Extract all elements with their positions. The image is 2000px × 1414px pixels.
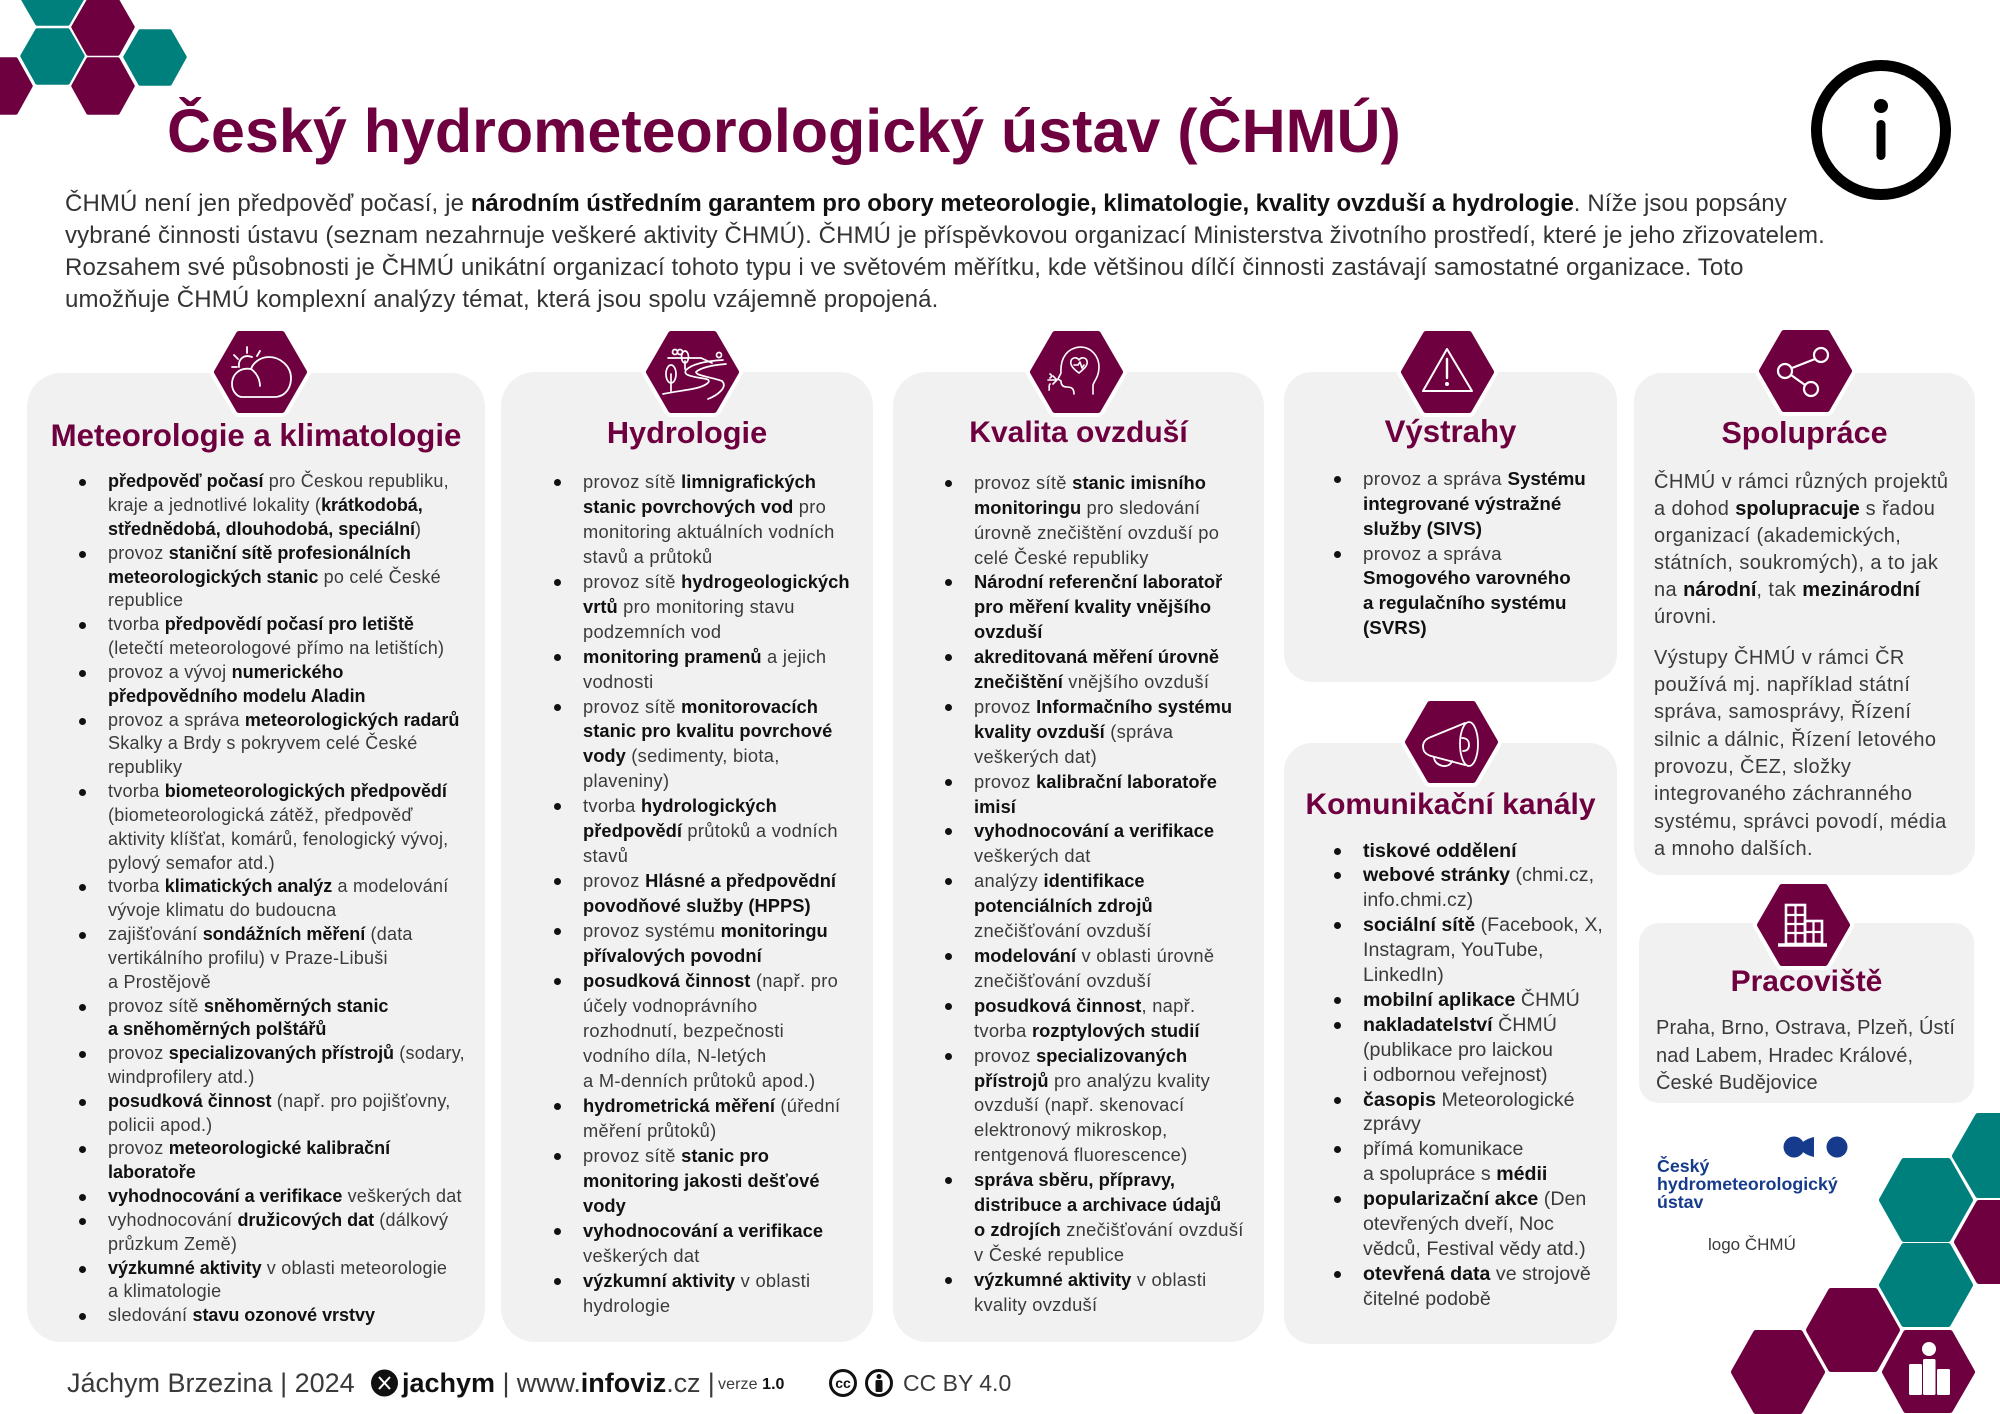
icon: head with heart [1026, 331, 1127, 417]
heading: Meteorologie a klimatologie [51, 418, 461, 453]
list: předpověď počasí pro Českou republiku, [108, 471, 449, 491]
paragraph 1 [1654, 470, 1948, 628]
list: provoz specializovaných [974, 1045, 1187, 1066]
list: policii apod.) [108, 1115, 212, 1135]
locations text [1656, 1016, 1955, 1094]
paragraph 1: na národní, tak mezinárodní [1654, 578, 1920, 600]
list: vývoje klimatu do budoucna [108, 900, 336, 920]
list: sledování stavu ozonové vrstvy [108, 1305, 375, 1325]
list: otevřených dveří, Noc [1363, 1213, 1554, 1235]
list: republice [108, 590, 183, 610]
list: provoz a správa [1363, 543, 1502, 564]
list: časopis Meteorologické [1363, 1089, 1575, 1111]
paragraph 2: integrovaného záchranného [1654, 783, 1912, 805]
list: provoz meteorologické kalibrační [108, 1138, 390, 1158]
list: vrtů pro monitoring stavu [583, 596, 795, 617]
intro text: umožňuje ČHMÚ komplexní analýzy témat, která jsou spolu vzájemně propojená. [65, 286, 938, 313]
list: webové stránky (chmi.cz, [1363, 864, 1594, 886]
list: kvality ovzduší (správa [974, 721, 1173, 742]
list: stavů [583, 845, 628, 866]
license: CC BY 4.0 [903, 1370, 1011, 1396]
list: analýzy identifikace [974, 870, 1145, 891]
list: monitoring pramenů a jejich [583, 646, 826, 667]
list: přímá komunikace [1363, 1138, 1523, 1160]
list: a sněhoměrných polštářů [108, 1019, 326, 1039]
list: v České republice [974, 1244, 1124, 1265]
list: imisí [974, 796, 1016, 817]
list: a klimatologie [108, 1281, 221, 1301]
panel: výstrahy [1284, 372, 1617, 682]
icon: info [1811, 60, 1951, 200]
list: Národní referenční laboratoř [974, 571, 1222, 592]
icon: cc: cc [835, 1375, 851, 1391]
list [945, 472, 1244, 1315]
list: vyhodnocování a verifikace [583, 1220, 823, 1241]
panel: spolupráce [1634, 373, 1975, 875]
list: vyhodnocování a verifikace [974, 820, 1214, 841]
list: vody [583, 1195, 626, 1216]
icon: megaphone [1401, 701, 1502, 787]
icon: infographic logo hexagon with podium [1882, 1330, 1975, 1413]
list: Skalky a Brdy s pokryvem celé České [108, 733, 418, 753]
list: hydrologie [583, 1295, 670, 1316]
icon: river landscape [642, 331, 743, 417]
list: stanic pro kvalitu povrchové [583, 720, 832, 741]
list: posudková činnost (např. pro pojišťovny, [108, 1091, 451, 1111]
footer [67, 1368, 1011, 1398]
locations text: Praha, Brno, Ostrava, Plzeň, Ústí [1656, 1017, 1955, 1039]
panel: pracoviště [1639, 923, 1974, 1103]
panel: meteorologie a klimatologie [27, 373, 485, 1342]
list [1334, 468, 1586, 638]
icon: X [371, 1370, 398, 1396]
list: úrovně znečištění ovzduší po [974, 522, 1219, 543]
list: monitoring aktuálních vodních [583, 521, 835, 542]
list: elektronový mikroskop, [974, 1119, 1168, 1140]
list: vodního díla, N-letých [583, 1045, 766, 1066]
locations text: České Budějovice [1656, 1072, 1818, 1094]
list: aktivity klíšťat, komárů, fenologický vývoj, [108, 829, 448, 849]
paragraph 2: Výstupy ČHMÚ v rámci ČR [1654, 647, 1905, 669]
paragraph 2: používá mj. například státní [1654, 674, 1910, 696]
list: (publikace pro laickou [1363, 1039, 1553, 1061]
paragraph 1: státních, soukromých), a to jak [1654, 552, 1938, 574]
list: modelování v oblasti úrovně [974, 945, 1214, 966]
list: republiky [108, 757, 182, 777]
logo mark [1784, 1136, 1848, 1158]
list: plaveniny) [583, 770, 669, 791]
title: Český hydrometeorologický ústav (ČHMÚ) [167, 97, 1401, 165]
list: provoz specializovaných přístrojů (sodary, [108, 1043, 465, 1063]
list: veškerých dat) [974, 746, 1097, 767]
list: zajišťování sondážních měření (data [108, 924, 413, 944]
icon: share nodes [1756, 330, 1856, 416]
list: znečišťování ovzduší [974, 970, 1151, 991]
list: vyhodnocování družicových dat (dálkový [108, 1210, 448, 1230]
logo caption: logo ČHMÚ [1708, 1235, 1796, 1254]
heading: Komunikační kanály [1305, 788, 1596, 821]
list: vyhodnocování a verifikace veškerých dat [108, 1186, 462, 1206]
heading: Spolupráce [1721, 416, 1888, 450]
list: (SVRS) [1363, 617, 1427, 638]
paragraph 2 [1654, 646, 1947, 860]
list: vody (sedimenty, biota, [583, 745, 780, 766]
handle and website: jachym | www.infoviz.cz | [402, 1368, 715, 1398]
list: vodnosti [583, 671, 654, 692]
logo wordmark [1657, 1156, 1838, 1212]
intro text [65, 190, 1825, 313]
author and year: Jáchym Brzezina | 2024 [67, 1368, 355, 1398]
list: tvorba hydrologických [583, 795, 777, 816]
list: laboratoře [108, 1162, 196, 1182]
list: hydrometrická měření (úřední [583, 1095, 840, 1116]
paragraph 1: úrovni. [1654, 606, 1717, 628]
list: měření průtoků) [583, 1120, 717, 1141]
list: služby (SIVS) [1363, 518, 1482, 539]
list: provoz a vývoj numerického [108, 662, 343, 682]
list: nakladatelství ČHMÚ [1363, 1014, 1557, 1036]
list: průzkum Země) [108, 1234, 237, 1254]
decoration: hexagons top left [0, 0, 187, 115]
list: Instagram, YouTube, [1363, 939, 1543, 961]
list: rozhodnutí, bezpečnosti [583, 1020, 784, 1041]
list: přívalových povodní [583, 945, 762, 966]
list: rentgenová fluorescence) [974, 1144, 1188, 1165]
icon: sun and cloud [210, 331, 311, 417]
list: provoz kalibrační laboratoře [974, 771, 1217, 792]
list: otevřená data ve strojově [1363, 1263, 1591, 1285]
icon: cc [829, 1369, 893, 1397]
list: ovzduší (např. skenovací [974, 1094, 1184, 1115]
intro text: Rozsahem své působnosti je ČHMÚ unikátní organizací tohoto typu i ve světovém měřítku, kde většinou dílčí činnosti zastávají samostatné organizace. Toto [65, 254, 1744, 281]
list: tiskové oddělení [1363, 840, 1517, 862]
list: znečišťování ovzduší [974, 920, 1151, 941]
list: tvorba biometeorologických předpovědí [108, 781, 447, 801]
heading: Výstrahy [1385, 414, 1516, 449]
list: LinkedIn) [1363, 964, 1444, 986]
list: provoz systému monitoringu [583, 920, 828, 941]
logo wordmark: Český [1657, 1156, 1709, 1176]
list: provoz a správa meteorologických radarů [108, 710, 459, 730]
list: ovzduší [974, 621, 1042, 642]
list: vědců, Festival vědy atd.) [1363, 1238, 1586, 1260]
paragraph 1: organizací (akademických, [1654, 524, 1901, 546]
list: mobilní aplikace ČHMÚ [1363, 989, 1580, 1011]
list: i odbornou veřejnost) [1363, 1064, 1548, 1086]
version: verze 1.0 [718, 1376, 784, 1393]
icon: buildings [1753, 884, 1854, 970]
list: celé České republiky [974, 547, 1149, 568]
paragraph 1: ČHMÚ v rámci různých projektů [1654, 470, 1948, 492]
list: o zdrojích znečišťování ovzduší [974, 1219, 1244, 1240]
list: kraje a jednotlivé lokality (krátkodobá, [108, 495, 423, 515]
heading: Hydrologie [607, 415, 767, 450]
intro text: vybrané činnosti ústavu (seznam nezahrnuje veškeré aktivity ČHMÚ). ČHMÚ je příspěvkovou organizací Ministerstva životního prostředí, které je jeho zřizovatelem. [65, 222, 1825, 249]
list: výzkumné aktivity v oblasti meteorologie [108, 1258, 447, 1278]
list: posudková činnost (např. pro [583, 970, 838, 991]
logo ČHMÚ [1657, 1136, 1848, 1254]
list: provoz sítě stanic imisního [974, 472, 1206, 493]
list: provoz sítě sněhoměrných stanic [108, 996, 388, 1016]
decoration: hexagons bottom right [1731, 1113, 2000, 1414]
list: provoz a správa Systému [1363, 468, 1586, 489]
panel: kvalita ovzduší [893, 372, 1264, 1342]
panel: hydrologie [501, 372, 873, 1342]
list: akreditovaná měření úrovně [974, 646, 1219, 667]
list: zprávy [1363, 1113, 1421, 1135]
list: veškerých dat [974, 845, 1091, 866]
logo wordmark: ústav [1657, 1192, 1703, 1212]
list: tvorba předpovědí počasí pro letiště [108, 614, 414, 634]
list: provoz Hlásné a předpovědní [583, 870, 836, 891]
list: správa sběru, přípravy, [974, 1169, 1175, 1190]
list: a spolupráce s médii [1363, 1163, 1547, 1185]
list: provoz Informačního systému [974, 696, 1232, 717]
list: meteorologických stanic po celé České [108, 567, 441, 587]
list: a regulačního systému [1363, 592, 1567, 613]
list: a Prostějově [108, 972, 211, 992]
heading: Kvalita ovzduší [969, 416, 1188, 449]
paragraph 2: správa, samosprávy, Řízení [1654, 701, 1911, 723]
list: provoz staniční sítě profesionálních [108, 543, 411, 563]
list: veškerých dat [583, 1245, 700, 1266]
list: a M-denních průtoků apod.) [583, 1070, 815, 1091]
list: přístrojů pro analýzu kvality [974, 1070, 1210, 1091]
list: předpovědního modelu Aladin [108, 686, 366, 706]
list: stavů a průtoků [583, 546, 712, 567]
list: distribuce a archivace údajů [974, 1194, 1221, 1215]
list: znečištění vnějšího ovzduší [974, 671, 1209, 692]
list: monitoring jakosti dešťové [583, 1170, 820, 1191]
paragraph 2: systému, správci povodí, média [1654, 811, 1947, 833]
list [79, 470, 465, 1325]
list: provoz sítě monitorovacích [583, 696, 818, 717]
list: předpovědí průtoků a vodních [583, 820, 838, 841]
list: (biometeorologická zátěž, předpověď [108, 805, 413, 825]
list: (letečtí meteorologové přímo na letištích) [108, 638, 444, 658]
list: posudková činnost, např. [974, 995, 1195, 1016]
list: popularizační akce (Den [1363, 1188, 1586, 1210]
list: střednědobá, dlouhodobá, speciální) [108, 519, 421, 539]
list: Smogového varovného [1363, 567, 1571, 588]
list: pro měření kvality vnějšího [974, 596, 1211, 617]
paragraph 1: a dohod spolupracuje s řadou [1654, 498, 1935, 520]
paragraph 2: a mnoho dalších. [1654, 838, 1813, 860]
list: čitelné podobě [1363, 1288, 1491, 1310]
heading: Pracoviště [1731, 965, 1882, 998]
list: kvality ovzduší [974, 1294, 1097, 1315]
paragraph 2: provozu, ČEZ, složky [1654, 756, 1851, 778]
list: vertikálního profilu) v Praze-Libuši [108, 948, 388, 968]
paragraph 2: silnic a dálnic, Řízení letového [1654, 729, 1936, 751]
list: integrované výstražné [1363, 493, 1561, 514]
list [1334, 840, 1603, 1310]
panel: komunikační kanály [1284, 743, 1617, 1344]
list: monitoringu pro sledování [974, 497, 1200, 518]
list: výzkumní aktivity v oblasti [583, 1270, 810, 1291]
list: windprofilery atd.) [108, 1067, 255, 1087]
list: tvorba klimatických analýz a modelování [108, 876, 448, 896]
list: provoz sítě stanic pro [583, 1145, 769, 1166]
list: provoz sítě limnigrafických [583, 471, 816, 492]
list: povodňové služby (HPPS) [583, 895, 811, 916]
list: provoz sítě hydrogeologických [583, 571, 850, 592]
list: sociální sítě (Facebook, X, [1363, 914, 1603, 936]
list: potenciálních zdrojů [974, 895, 1153, 916]
intro text: ČHMÚ není jen předpověď počasí, je národním ústředním garantem pro obory meteorologie, klimatologie, kvality ovzduší a hydrologie. Níže jsou popsány [65, 190, 1787, 217]
list [554, 471, 850, 1316]
logo wordmark: hydrometeorologický [1657, 1174, 1838, 1194]
list: tvorba rozptylových studií [974, 1020, 1200, 1041]
list: podzemních vod [583, 621, 721, 642]
list: pylový semafor atd.) [108, 853, 275, 873]
list: účely vodnoprávního [583, 995, 757, 1016]
list: výzkumné aktivity v oblasti [974, 1269, 1206, 1290]
icon: warning triangle [1397, 331, 1498, 417]
list: info.chmi.cz) [1363, 889, 1473, 911]
locations text: nad Labem, Hradec Králové, [1656, 1045, 1913, 1067]
list: stanic povrchových vod pro [583, 496, 826, 517]
